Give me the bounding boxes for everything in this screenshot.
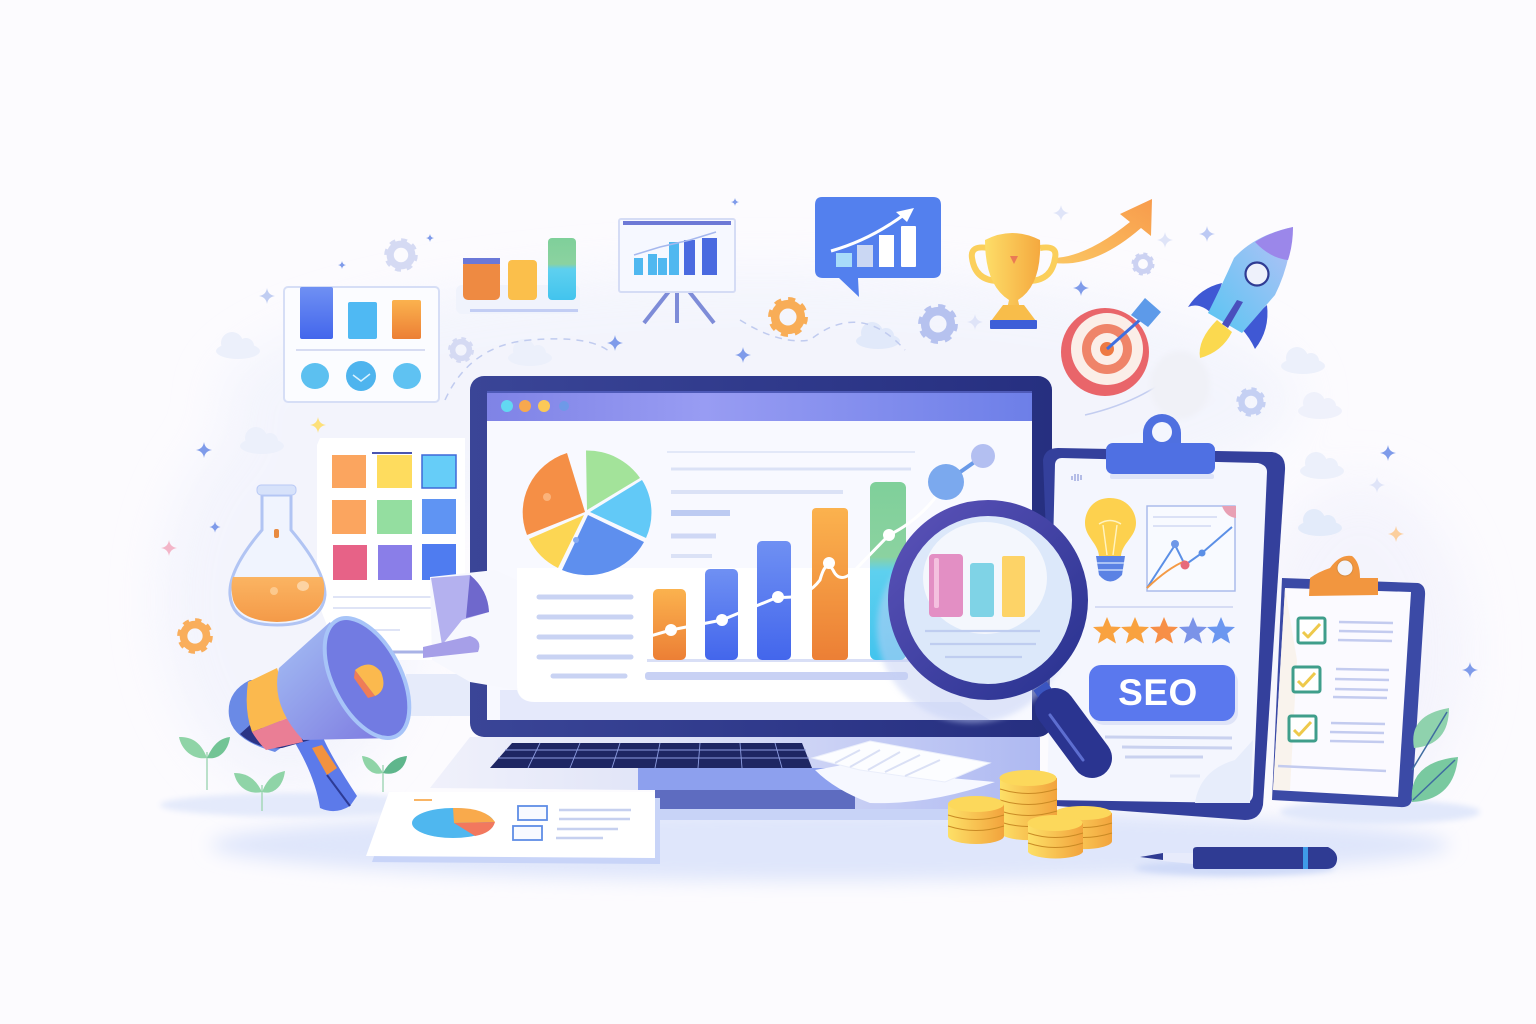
paper and pen overlapping monitor [392,570,517,716]
coin stack front [1028,815,1083,858]
coin stack left [948,796,1004,844]
icon: trophy with arrow [972,199,1152,329]
clipboard text lines [1105,737,1232,776]
bar chart [645,482,912,680]
icon: light bulb [1085,498,1136,582]
screen text lines [667,452,915,556]
icon: sprouts [179,737,407,811]
SEO badge: SEO [1118,672,1198,713]
main clipboard [1043,414,1285,820]
star rating [1093,617,1235,644]
icon: target with dart [1061,298,1161,396]
coin stacks [948,770,1112,858]
papers on desk [812,741,995,803]
SEO badge [1089,665,1238,725]
icon: pen [1140,847,1337,869]
clip ring [1143,414,1181,445]
coin stack tall [1000,770,1057,840]
icon: rocket [1188,227,1293,358]
check items [1289,618,1325,741]
lower data card [517,568,930,702]
monitor [470,376,1052,737]
background haze [160,270,1470,820]
desk surface [160,793,1480,881]
orange clip [1309,556,1378,596]
checklist lines [1278,622,1393,771]
sparkles [161,198,1478,678]
icon: flask [230,485,325,625]
trend line [647,444,995,637]
mini line chart [1147,506,1236,591]
icon: gears [179,240,1264,652]
keyboard [490,743,812,768]
laptop base and stand [430,737,1040,820]
document on desk [366,792,660,864]
panel: colored column card [456,238,580,314]
coin stack back [1054,806,1112,849]
window control dots [501,400,569,412]
second clipboard [1272,556,1425,807]
pie chart [523,450,651,575]
decorative clouds [216,320,1344,536]
lower card text lines [539,597,631,676]
icon: presentation board [619,219,735,323]
panel: bars and dials card [284,287,439,402]
icon: magnifying glass [877,508,1092,760]
panel: color grid sheet [317,438,465,660]
icon: leaves [1412,708,1458,802]
clip bar [1106,443,1215,474]
icon: megaphone [229,605,427,811]
icon: growth chat bubble [815,197,941,297]
small mark [1072,474,1081,481]
